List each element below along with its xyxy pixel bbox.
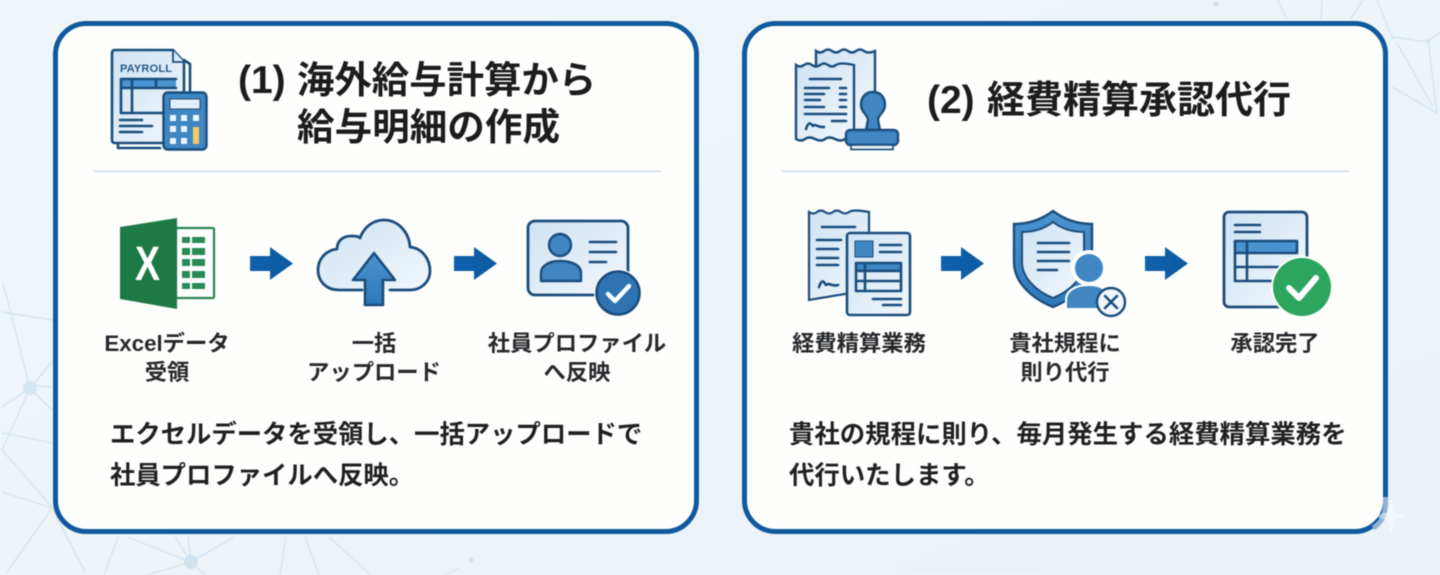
label: expense work: 経費精算業務 [792, 331, 926, 356]
icon: approved document [1224, 212, 1333, 318]
arrow: step 1 to 2 [250, 247, 293, 280]
label: approval complete: 承認完了 [1230, 331, 1320, 356]
heading: payroll: (1) [238, 59, 286, 102]
label: on behalf per rules: 則り代行 [1020, 360, 1110, 385]
heading: expense approval: (2) [927, 79, 975, 122]
heading icon: payroll and calculator: PAYROLL [120, 63, 172, 75]
icon: shield with person [1014, 211, 1125, 316]
icon: employee profile card [528, 221, 642, 317]
label: bulk upload: 一括 [352, 331, 396, 356]
icon: excel: X [135, 238, 160, 291]
arrow: step 1 to 2 [941, 247, 984, 280]
icon: receipt and form [809, 210, 910, 315]
arrow: step 2 to 3 [1145, 247, 1188, 280]
icon: excel [120, 218, 214, 309]
description: expense approval: 代行いたします。 [789, 462, 990, 490]
heading icon: receipts and stamp [796, 50, 898, 150]
heading: expense approval: 経費精算承認代行 [987, 80, 1291, 122]
panel: payroll [56, 24, 696, 532]
icon: cloud upload [318, 220, 430, 305]
label: reflect to profile: へ反映 [544, 360, 610, 385]
description: expense approval: 貴社の規程に則り、毎月発生する経費精算業務を [789, 421, 1347, 449]
label: excel data: 受領 [145, 360, 189, 385]
panel: expense approval [744, 24, 1386, 532]
label: bulk upload: アップロード [307, 360, 441, 385]
label: excel data: Excelデータ [104, 331, 230, 356]
description: payroll: 社員プロファイルへ反映。 [110, 462, 414, 490]
description: payroll: エクセルデータを受領し、一括アップロードで [110, 421, 642, 449]
heading: payroll: 給与明細の作成 [297, 106, 560, 148]
label: on behalf per rules: 貴社規程に [1009, 331, 1121, 356]
heading: payroll [238, 59, 596, 148]
arrow: step 2 to 3 [454, 247, 497, 280]
heading icon: payroll and calculator [112, 50, 206, 150]
label: reflect to profile: 社員プロファイル [488, 331, 666, 356]
heading: payroll: 海外給与計算から [297, 59, 596, 101]
